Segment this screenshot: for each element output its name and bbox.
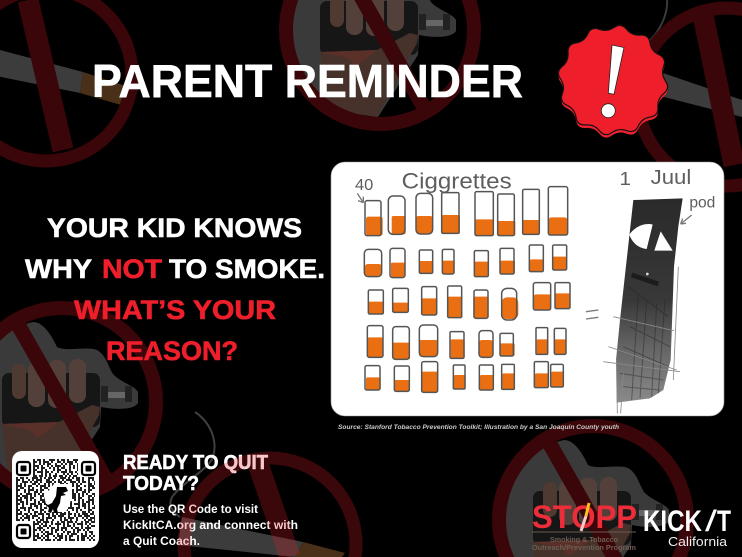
headline text: TO SMOKE. [169,254,325,284]
logo: Kick It California: T [717,505,731,538]
call to action heading [123,452,268,495]
QR code [12,451,99,548]
hand-drawn labels [355,167,715,319]
panel: illustration [331,162,724,416]
headline text: WHY [25,254,92,284]
logo: Kick It California [643,505,731,549]
icon: no vape top centre [280,0,474,124]
headline text: NOT [102,254,163,284]
logo: Kick It California: KICK [643,505,702,538]
call to action text: KickItCA.org and connect with [123,520,298,532]
call to action heading: READY TO QUIT [123,452,268,474]
headline text [25,213,325,366]
icon: cigarette and smoke bottom centre [170,412,345,557]
icon: no cigarette top left [0,0,138,161]
call to action heading: TODAY? [123,473,199,495]
icon: no vape middle left [0,308,156,496]
logo: STOPP [532,499,637,552]
hand-drawn labels: 40 [355,177,373,194]
icon: no cigarette top right [638,0,742,186]
illustration: Juul pod [603,198,683,413]
headline text: WHAT’S YOUR [74,295,276,325]
hand-drawn labels: Ciggrettes [402,168,512,193]
logo: STOPP: STOPP [532,499,637,535]
source credit: Source: Stanford Tobacco Prevention Toolkit; Illustration by a San Joaquin County youth [338,425,619,431]
hand-drawn labels: 1 [619,168,631,189]
icon: prohibition ring over call to action [184,458,356,557]
icon: alert badge [551,18,675,145]
call to action text: Use the QR Code to visit [123,504,258,516]
logo: STOPP: Outreach/Prevention Program [532,545,636,552]
logo: STOPP: Smoking & Tobacco [550,537,618,544]
icon: no vape bottom right [493,426,687,557]
call to action text [123,504,298,548]
title: PARENT REMINDER [92,55,523,107]
call to action text: a Quit Coach. [123,536,200,548]
cigarette rows [364,187,570,392]
logo: Kick It California: / [705,505,718,538]
hand-drawn labels: Juul [651,167,691,189]
headline text: REASON? [106,336,238,366]
logo: Kick It California: California [668,534,728,549]
hand-drawn labels: pod [689,195,715,212]
headline text: YOUR KID KNOWS [47,213,302,243]
